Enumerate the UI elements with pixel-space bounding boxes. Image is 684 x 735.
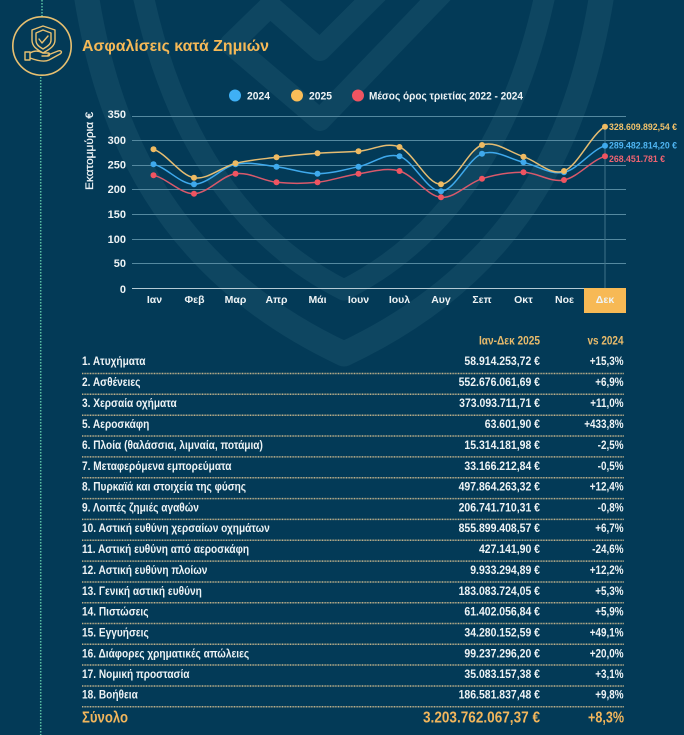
December value labels: 328.609.892,54 € xyxy=(609,122,677,132)
table header: vs 2024 xyxy=(588,336,624,348)
row changes vs 2024: +15,3% xyxy=(590,355,624,368)
y axis labels: 250 xyxy=(108,160,126,172)
row values: 183.083.724,05 € xyxy=(459,586,540,598)
series: average 2022-2024 xyxy=(150,153,608,200)
row changes vs 2024: +6,9% xyxy=(595,376,624,389)
December highlight xyxy=(584,288,626,313)
row changes vs 2024: +49,1% xyxy=(590,627,624,640)
row labels: 18. Βοήθεια xyxy=(82,689,138,702)
x axis labels: Σεπ xyxy=(472,294,492,306)
series: 2025 xyxy=(150,124,608,187)
legend xyxy=(229,90,524,102)
legend: 2025 xyxy=(309,90,332,102)
row labels: 15. Εγγυήσεις xyxy=(82,627,149,640)
row values: 427.141,90 € xyxy=(479,544,540,556)
row values: 497.864.263,32 € xyxy=(459,481,540,494)
row values: 373.093.711,71 € xyxy=(459,398,540,410)
row labels: 2. Ασθένειες xyxy=(82,376,141,389)
row changes vs 2024: +9,8% xyxy=(595,689,624,702)
row labels: 12. Αστική ευθύνη πλοίων xyxy=(82,564,207,577)
row labels: 1. Ατυχήματα xyxy=(82,355,146,368)
total row: 3.203.762.067,37 € xyxy=(423,710,540,726)
row labels: 11. Αστική ευθύνη από αεροσκάφη xyxy=(82,543,249,556)
row changes vs 2024: -24,6% xyxy=(592,543,624,556)
row labels: 14. Πιστώσεις xyxy=(82,606,149,619)
table header xyxy=(479,336,624,348)
series: 2024 xyxy=(150,143,608,194)
row labels: 17. Νομική προστασία xyxy=(82,668,190,681)
row labels: 7. Μεταφερόμενα εμπορεύματα xyxy=(82,460,232,473)
x axis labels: Οκτ xyxy=(514,294,533,306)
row labels: 3. Χερσαία οχήματα xyxy=(82,397,177,410)
row changes vs 2024: +11,0% xyxy=(590,397,624,410)
row values: 15.314.181,98 € xyxy=(464,440,540,452)
row labels: 9. Λοιπές ζημιές αγαθών xyxy=(82,502,199,515)
row labels: 16. Διάφορες χρηματικές απώλειες xyxy=(82,648,249,661)
x axis labels: Ιουλ xyxy=(389,294,410,306)
row values: 9.933.294,89 € xyxy=(470,565,540,577)
y axis labels: 50 xyxy=(114,258,126,270)
x axis labels: Νοε xyxy=(555,294,574,306)
table xyxy=(82,336,624,726)
row changes vs 2024: +20,0% xyxy=(590,648,624,661)
y axis labels: 350 xyxy=(108,109,126,121)
row values: 61.402.056,84 € xyxy=(464,606,540,619)
row changes vs 2024: +12,2% xyxy=(590,564,624,577)
row changes vs 2024: +3,1% xyxy=(595,668,624,681)
row values: 58.914.253,72 € xyxy=(464,356,540,368)
x axis labels: Ιουν xyxy=(348,294,369,306)
y axis labels: 200 xyxy=(108,184,126,196)
row labels: 13. Γενική αστική ευθύνη xyxy=(82,585,202,598)
row values: 34.280.152,59 € xyxy=(464,627,540,640)
row values: 855.899.408,57 € xyxy=(459,523,540,535)
y axis labels: 0 xyxy=(120,284,126,296)
x axis labels: Μαρ xyxy=(225,294,247,306)
row values: 63.601,90 € xyxy=(485,419,540,431)
x axis labels xyxy=(147,294,614,306)
total row: +8,3% xyxy=(588,710,624,726)
legend: Μέσος όρος τριετίας 2022 - 2024 xyxy=(369,90,524,102)
row changes vs 2024: +5,9% xyxy=(595,606,624,619)
row labels: 5. Αεροσκάφη xyxy=(82,418,149,431)
y axis labels xyxy=(108,109,126,296)
x axis labels: Ιαν xyxy=(147,294,162,306)
row changes vs 2024: +12,4% xyxy=(590,481,624,494)
row values: 186.581.837,48 € xyxy=(459,689,540,702)
row values: 552.676.061,69 € xyxy=(459,377,540,389)
line chart xyxy=(84,109,677,313)
row values xyxy=(459,356,540,702)
y axis labels: 300 xyxy=(108,135,126,147)
row changes vs 2024: -2,5% xyxy=(598,439,624,452)
row changes vs 2024: -0,5% xyxy=(598,460,624,473)
row labels xyxy=(82,355,270,702)
icon: shield on open hand xyxy=(13,17,71,75)
x axis labels: Απρ xyxy=(265,294,288,306)
title: Ασφαλίσεις κατά Ζημιών xyxy=(82,38,269,55)
row changes vs 2024 xyxy=(584,355,624,702)
y axis title: Εκατομμύρια € xyxy=(84,112,96,190)
total row: Σύνολο xyxy=(82,710,128,726)
row values: 33.166.212,84 € xyxy=(464,461,540,473)
row changes vs 2024: +433,8% xyxy=(584,418,624,431)
row labels: 8. Πυρκαϊά και στοιχεία της φύσης xyxy=(82,481,246,494)
December value labels xyxy=(609,122,677,164)
row labels: 6. Πλοία (θαλάσσια, λιμναία, ποτάμια) xyxy=(82,439,263,452)
total row xyxy=(82,710,624,726)
row changes vs 2024: +5,3% xyxy=(595,585,624,598)
row values: 206.741.710,31 € xyxy=(459,502,540,515)
x axis labels: Μάι xyxy=(308,294,327,306)
row labels: 10. Αστική ευθύνη χερσαίων οχημάτων xyxy=(82,522,270,535)
table header: Ιαν-Δεκ 2025 xyxy=(479,336,541,348)
row changes vs 2024: +6,7% xyxy=(595,522,624,535)
y axis labels: 150 xyxy=(108,209,126,221)
row changes vs 2024: -0,8% xyxy=(598,502,624,515)
row values: 35.083.157,38 € xyxy=(464,669,540,681)
x axis labels: Δεκ xyxy=(596,294,614,306)
December value labels: 289.482.814,20 € xyxy=(609,140,677,150)
December value labels: 268.451.781 € xyxy=(609,154,665,164)
y axis labels: 100 xyxy=(108,234,126,246)
x axis labels: Αυγ xyxy=(431,294,451,306)
row values: 99.237.296,20 € xyxy=(464,648,540,661)
x axis labels: Φεβ xyxy=(184,294,205,306)
legend: 2024 xyxy=(247,90,271,102)
